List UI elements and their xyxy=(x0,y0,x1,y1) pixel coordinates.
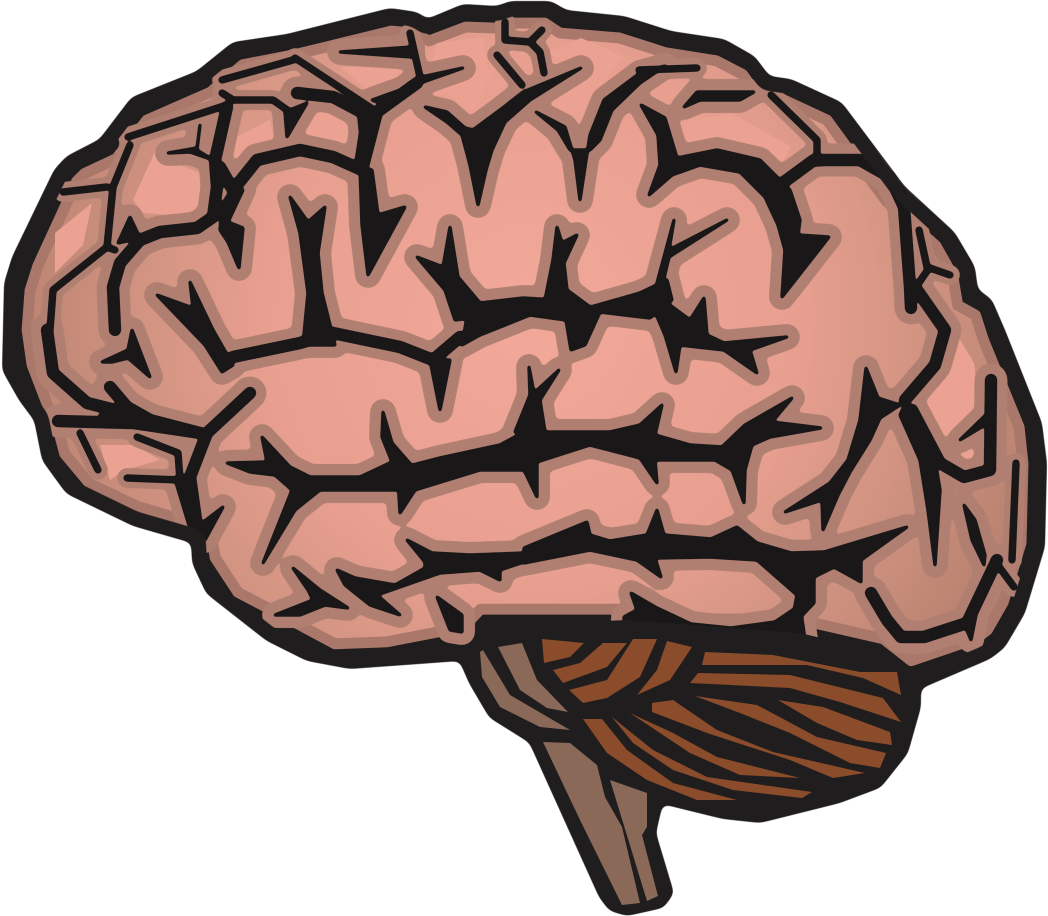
sulcus halos xyxy=(47,22,1016,640)
cortex base xyxy=(27,23,1023,661)
lower cortex shadow band xyxy=(480,620,880,680)
brainstem xyxy=(480,643,658,905)
lighter gyrus highlights xyxy=(55,37,986,480)
outer rim xyxy=(42,12,1024,653)
sulcus black lines xyxy=(47,22,1016,640)
cerebellum xyxy=(542,639,901,800)
